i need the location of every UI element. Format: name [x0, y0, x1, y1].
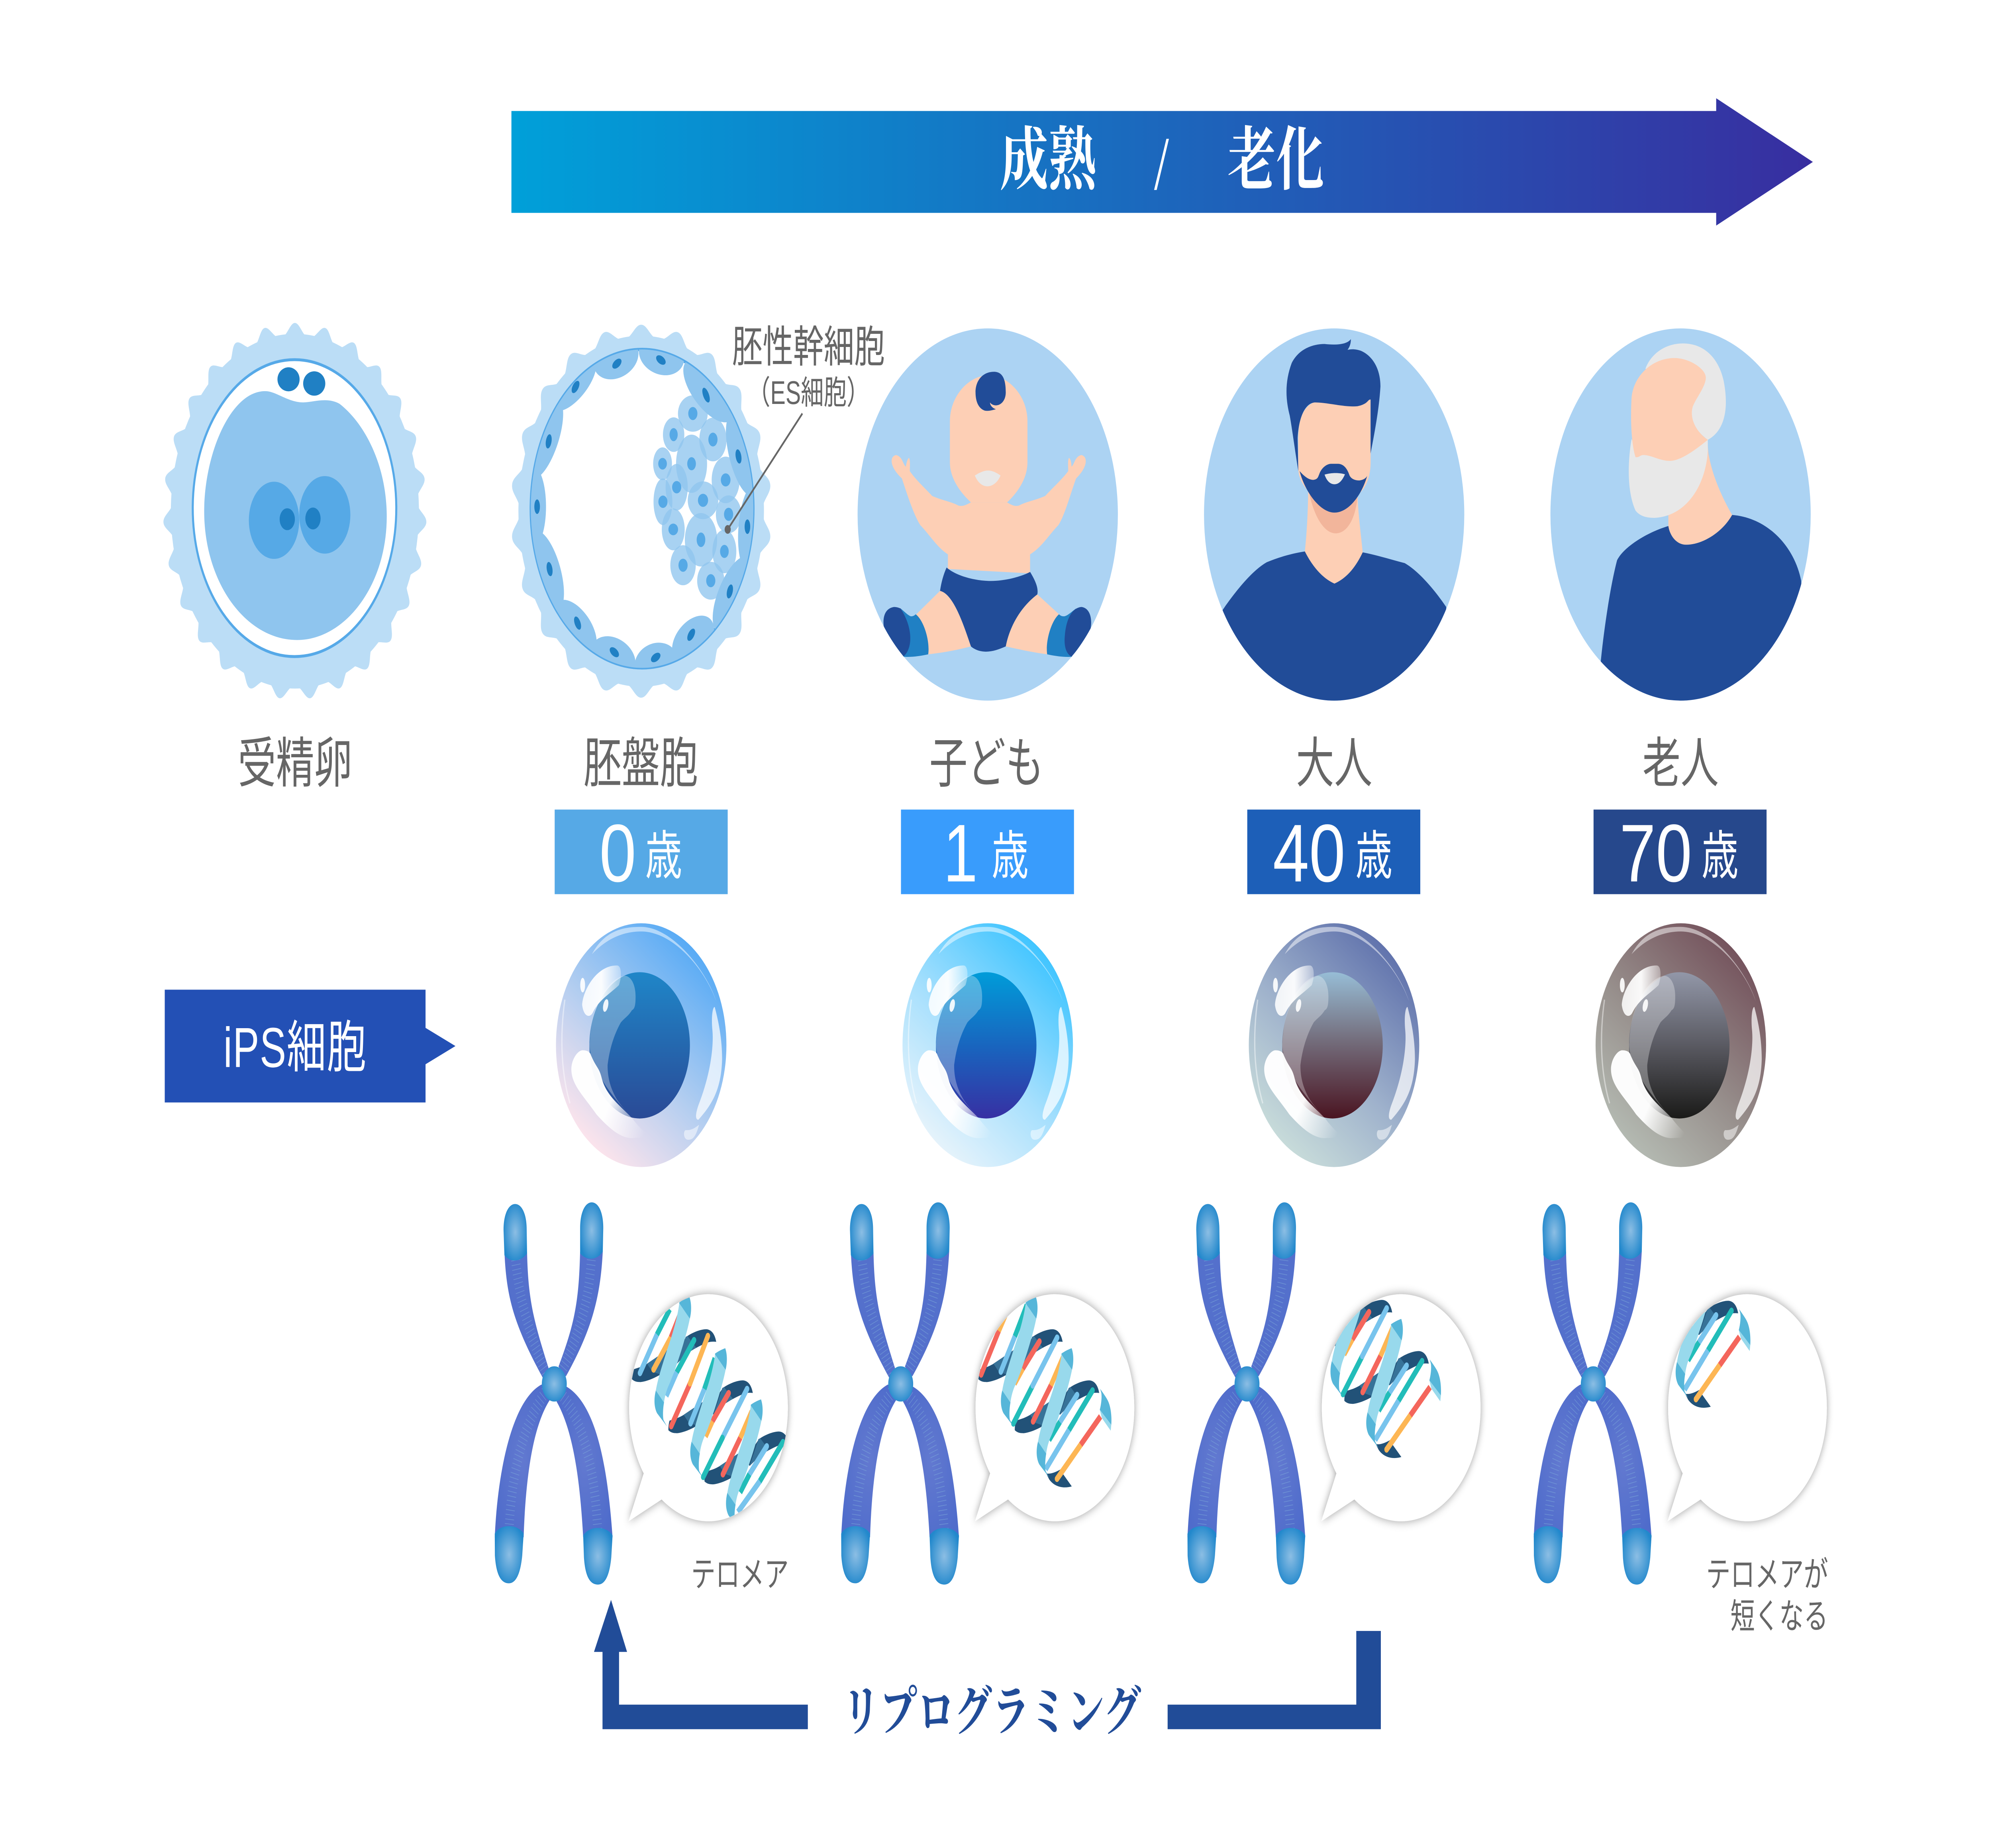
label: blastocyst: 胚盤胞: [584, 733, 698, 794]
age badge 1: [901, 807, 1074, 899]
embryonic stem cell callout: [725, 323, 885, 534]
age badge 0: 歳: [645, 827, 682, 886]
arrow title: 成熟: [1000, 123, 1099, 199]
label: child: 子ども: [929, 733, 1044, 794]
baby portrait: [858, 328, 1118, 701]
age badge 0: 0: [599, 807, 636, 899]
chromosome 1: [495, 1202, 613, 1585]
chromosome 3: [1188, 1202, 1305, 1585]
embryonic stem cell callout: 胚性幹細胞: [732, 323, 885, 372]
age badge 40: 歳: [1355, 827, 1392, 886]
speech bubble with telomere, age 40: [1308, 1268, 1480, 1521]
iPS cell sphere age 0: [556, 923, 726, 1167]
elderly man portrait: [1551, 328, 1811, 708]
age badge 70: 70: [1619, 807, 1692, 899]
age badge 40: [1247, 807, 1420, 899]
age badge 70: [1594, 807, 1767, 899]
caption: telomere shortens: 短くなる: [1731, 1597, 1828, 1636]
chromosome 2: [841, 1202, 959, 1585]
age badge 1: 1: [943, 807, 978, 899]
chromosome 4: [1534, 1202, 1651, 1585]
age badge 1: 歳: [992, 827, 1029, 886]
label: adult: 大人: [1296, 733, 1372, 794]
iPS cell sphere age 1: [902, 923, 1073, 1167]
blastocyst illustration: [510, 325, 773, 698]
label: fertilized egg: 受精卵: [238, 733, 353, 794]
reprogramming arrow, left part with head: [594, 1600, 808, 1729]
fertilized egg illustration: [163, 323, 427, 701]
age badge 40: 40: [1273, 807, 1345, 899]
arrow title: [1000, 122, 1324, 206]
iPS cell sphere age 70: [1596, 923, 1766, 1167]
arrow title: 老化: [1227, 123, 1324, 199]
iPS cell label arrow: [165, 990, 455, 1103]
reprogramming label: リプログラミング: [842, 1683, 1141, 1742]
iPS cell sphere age 40: [1249, 923, 1419, 1167]
age badge 70: 歳: [1702, 827, 1739, 886]
maturation / aging arrow: [512, 98, 1813, 225]
caption: telomere: テロメア: [691, 1556, 789, 1594]
reprogramming arrow, right part: [1168, 1631, 1381, 1729]
caption: telomere shortens: テロメアが: [1706, 1556, 1828, 1594]
label: elderly: 老人: [1642, 733, 1719, 794]
speech bubble with telomere, age 1: [975, 1294, 1134, 1521]
iPS cell label arrow: iPS細胞: [224, 1016, 367, 1079]
adult man portrait: [1204, 328, 1464, 708]
speech bubble with short telomere, age 70: [1617, 1217, 1827, 1521]
embryonic stem cell callout: （ES細胞）: [747, 375, 870, 411]
inner cell mass: [653, 395, 741, 600]
caption: telomere shortens: [1706, 1556, 1828, 1636]
age badge 0: [555, 807, 728, 899]
arrow title: /: [1154, 122, 1169, 206]
speech bubble with long telomere: [629, 1294, 789, 1529]
